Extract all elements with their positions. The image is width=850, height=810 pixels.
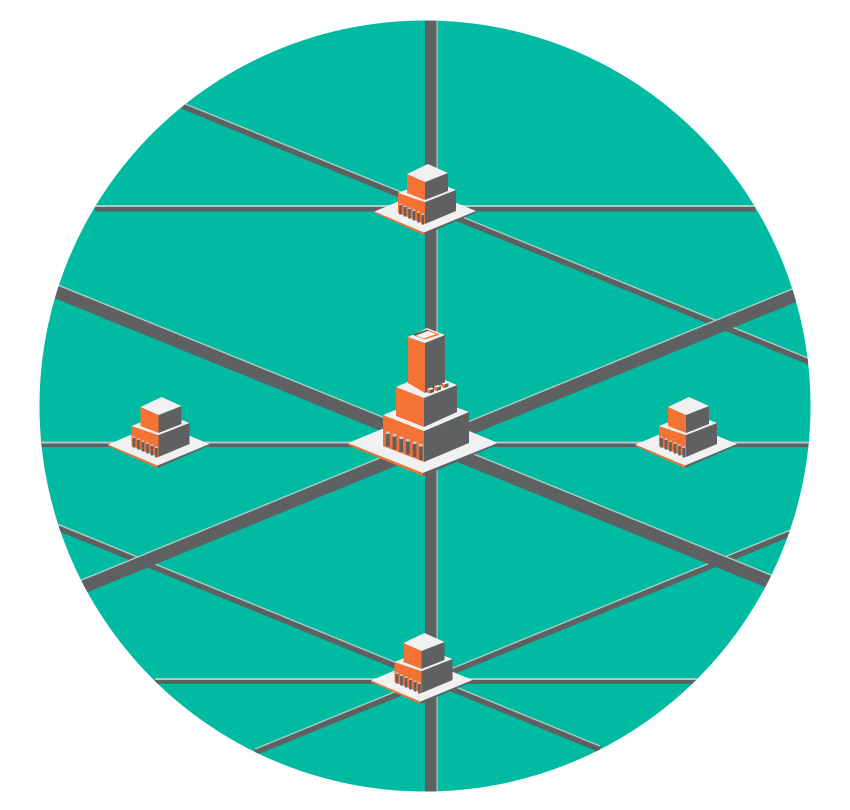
central skyscraper [348,328,498,476]
thick diagonal roads [40,278,810,592]
bottom building [371,633,472,704]
rooftop vents [427,382,448,394]
tower roof inset [412,330,440,340]
horizontal roads [30,205,820,684]
thin diagonal roads [40,103,830,752]
tower [408,337,425,393]
lower tier [383,415,424,462]
left building [108,397,210,468]
right building [636,397,737,468]
top building [374,164,476,235]
middle tier [396,387,424,427]
plaza [348,443,423,476]
entrance columns [388,432,421,460]
vertical road [425,15,438,795]
